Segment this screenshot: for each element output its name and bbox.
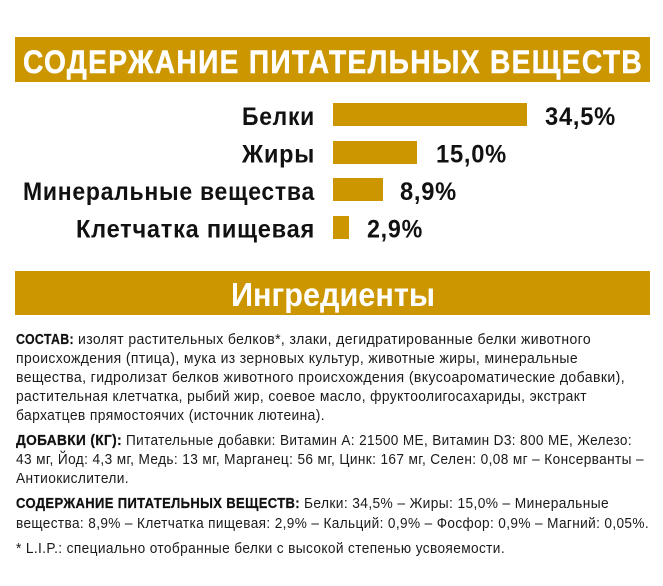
- text block: additives: Антиокислители.: [16, 471, 129, 487]
- bar row: fats: Жиры: [241, 140, 315, 168]
- bar row: fibre: 2,9%: [367, 216, 423, 244]
- text block: additives: 43 мг, Йод: 4,3 мг, Медь: 13 мг, Марганец: 56 мг, Цинк: 167 мг, Селен: 0,08 мг – Консерванты –: [16, 450, 644, 468]
- text block: additives: Питательные добавки: Витамин А: 21500 МЕ, Витамин D3: 800 МЕ, Железо:: [126, 433, 632, 449]
- text block: nutrient content: [16, 496, 649, 532]
- bar row: fats: 15,0%: [436, 140, 507, 168]
- text block: additives: [16, 433, 644, 487]
- bar row: protein: Белки: [242, 103, 315, 131]
- text block: composition: СОСТАВ:: [16, 332, 74, 348]
- bar row: fats: [241, 140, 507, 168]
- footnote: * L.I.P.: специально отобранные белки с высокой степенью усвояемости.: [16, 541, 505, 557]
- ingredients banner: [15, 271, 650, 315]
- text block: composition: бархатцев прямостоячих (источник лютеина).: [16, 408, 325, 424]
- bar row: fibre: Клетчатка пищевая: [76, 216, 315, 244]
- text block: composition: происхождения (птица), мука из зерновых культур, животные жиры, минеральные: [16, 351, 578, 367]
- text block: additives: ДОБАВКИ (КГ):: [16, 433, 122, 449]
- text block: composition: растительная клетчатка, рыбий жир, соевое масло, фруктоолигосахариды, экстракт: [16, 389, 587, 405]
- text block: composition: вещества, гидролизат белков животного происхождения (вкусоароматические добавки),: [16, 370, 625, 386]
- text block: nutrient content: Белки: 34,5% – Жиры: 15,0% – Минеральные: [304, 496, 609, 512]
- bar row: minerals: 8,9%: [400, 178, 457, 206]
- text block: composition: изолят растительных белков*, злаки, дегидратированные белки животного: [78, 332, 591, 348]
- bar chart: nutrients: [23, 103, 616, 244]
- ingredients banner: Ингредиенты: [231, 276, 435, 313]
- text block: nutrient content: СОДЕРЖАНИЕ ПИТАТЕЛЬНЫХ ВЕЩЕСТВ:: [16, 496, 300, 512]
- bar row: minerals: Минеральные вещества: [23, 178, 315, 206]
- bar row: protein: 34,5%: [545, 103, 616, 131]
- text block: composition: [16, 332, 625, 424]
- bar row: protein: [242, 103, 616, 131]
